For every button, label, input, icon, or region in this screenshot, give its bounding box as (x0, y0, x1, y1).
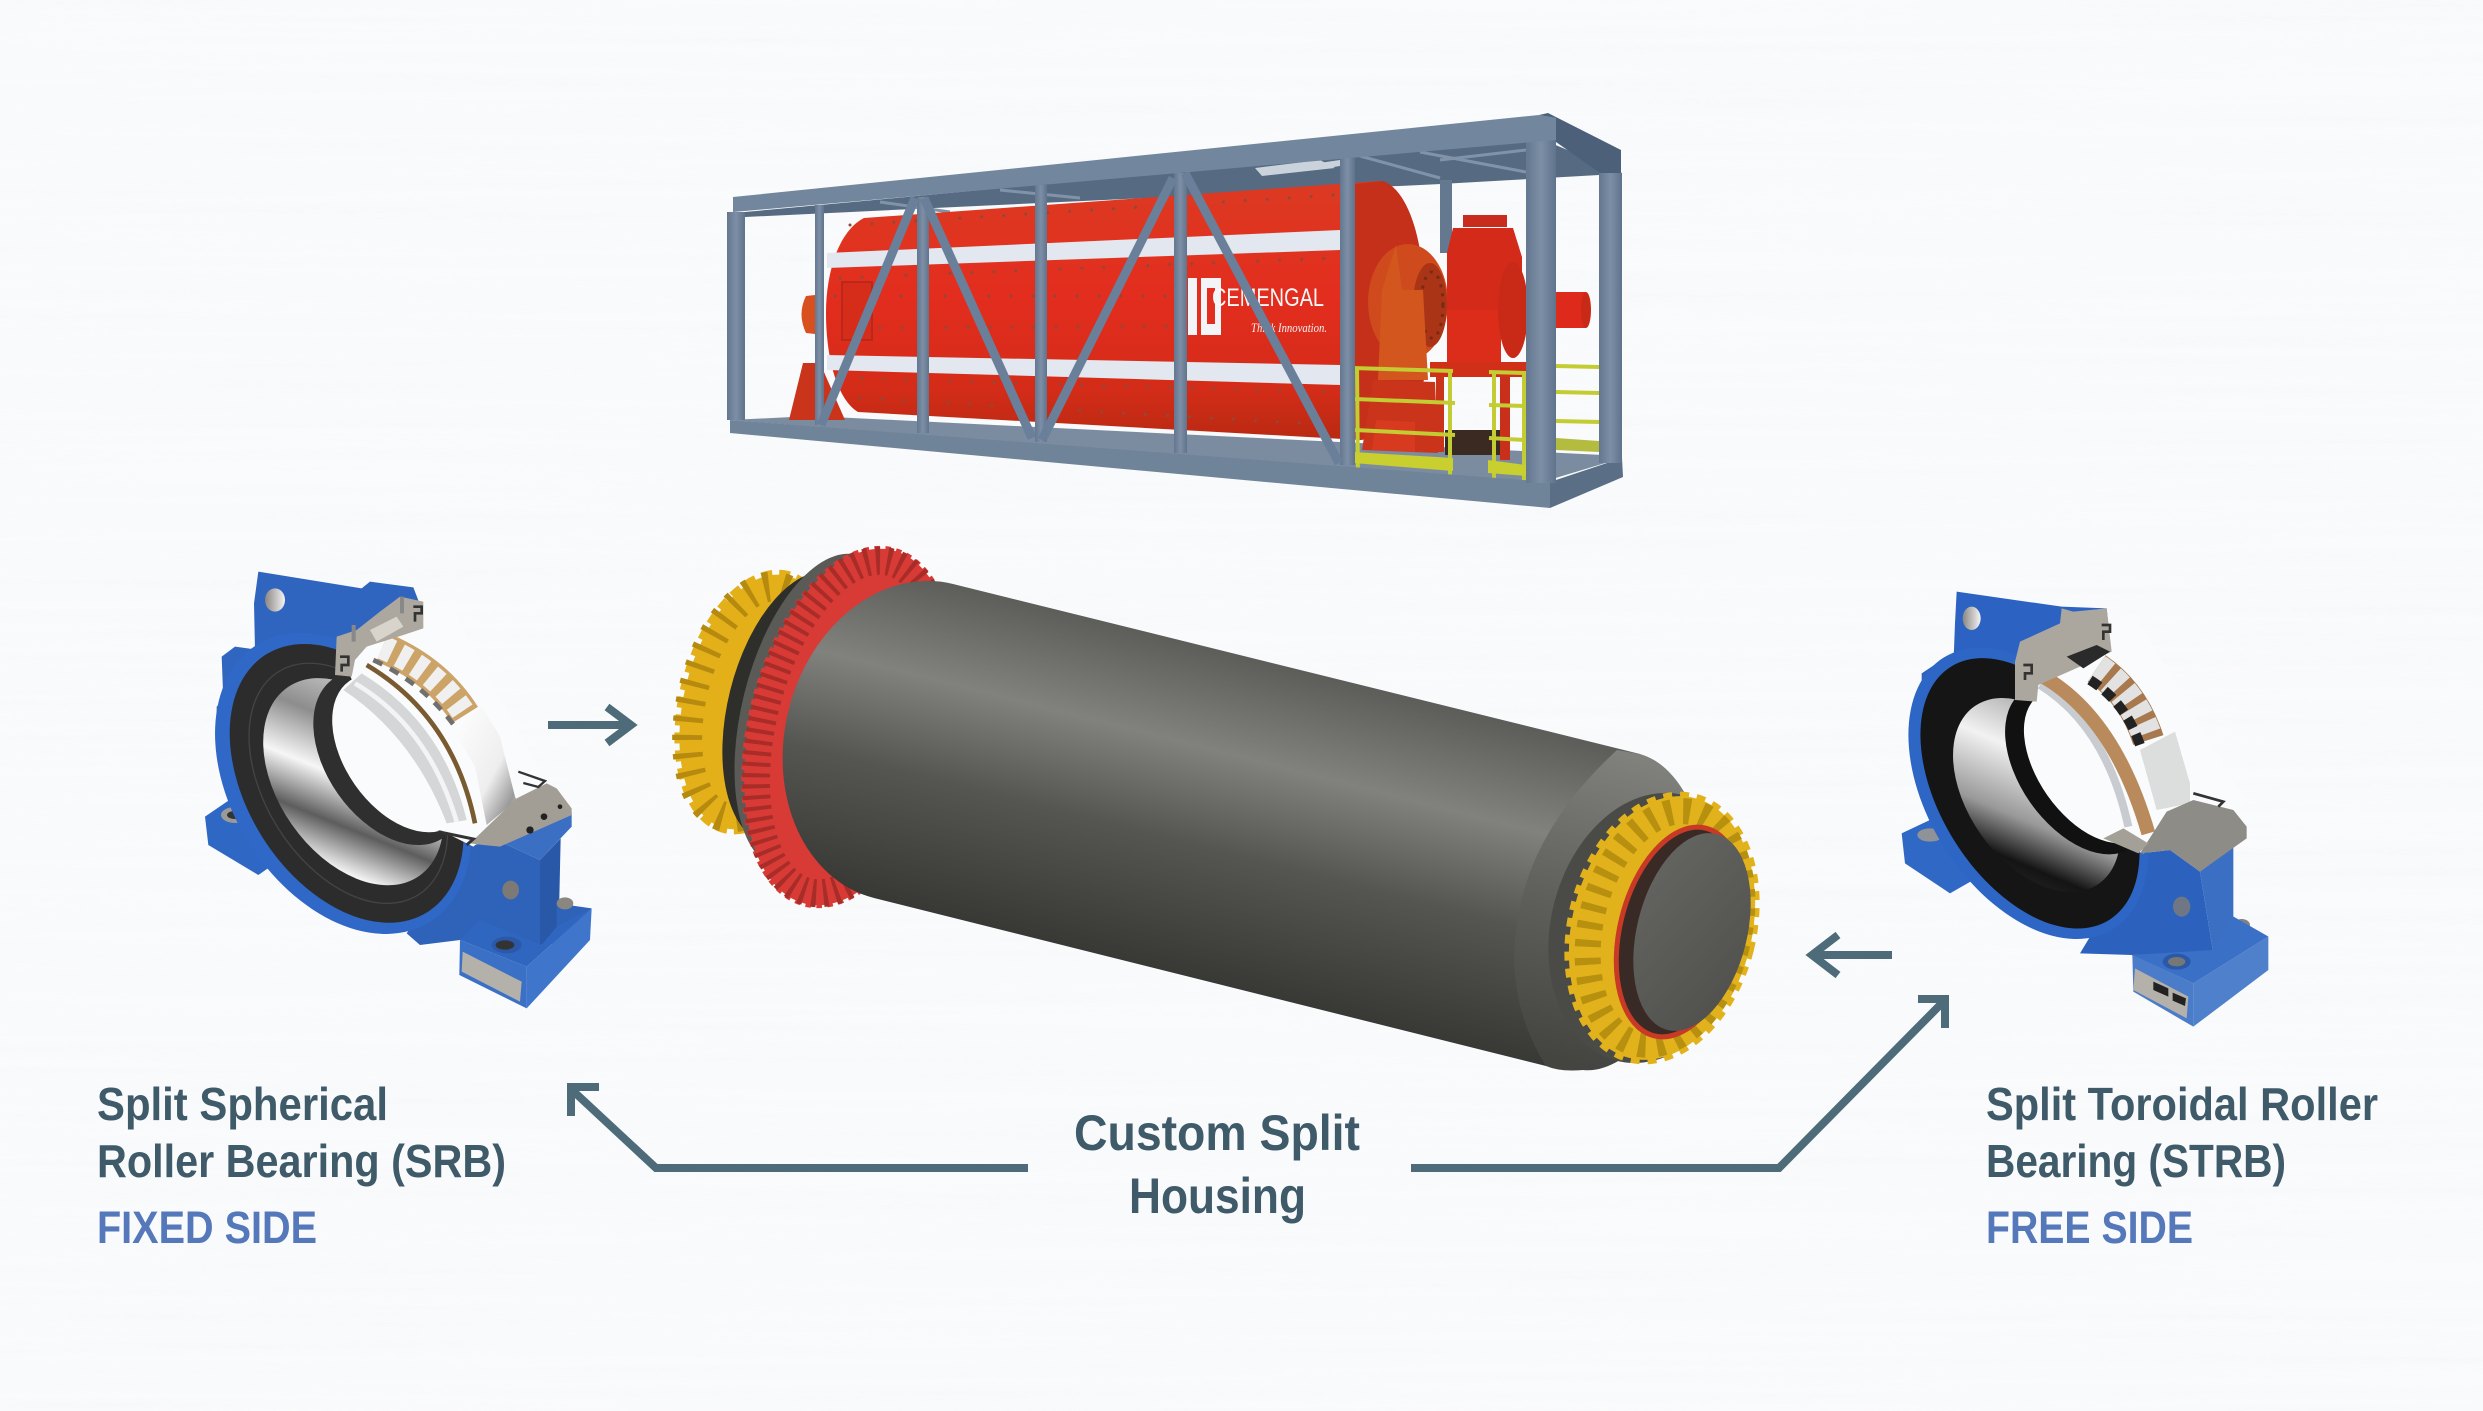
frame diagonal braces (821, 173, 1339, 463)
see-through opening (1998, 667, 2179, 866)
lower plate (438, 772, 572, 847)
label: left bearing: Roller Bearing (SRB) (97, 1135, 506, 1187)
label: right bearing: FREE SIDE (1986, 1202, 2193, 1253)
top seal section (2015, 608, 2112, 702)
Cemengal logo: Think Innovation. (1251, 320, 1327, 335)
housing lugs (1915, 663, 1953, 757)
yellow gear near end (1540, 774, 1784, 1082)
nameplate (2133, 968, 2188, 1018)
yellow railings (1353, 366, 1599, 490)
see-through opening (304, 649, 496, 857)
roof underside of frame (745, 138, 1622, 217)
white bands (827, 230, 1340, 268)
roller shaft assembly (652, 525, 1784, 1085)
mill left trunnion (802, 295, 815, 334)
label: custom split housing: Housing (1129, 1168, 1306, 1224)
label: right bearing: Bearing (STRB) (1986, 1135, 2286, 1187)
mill shell (826, 181, 1422, 440)
label: left bearing: Split Spherical (97, 1078, 388, 1130)
frame top beam (733, 115, 1556, 212)
cutaway gap (337, 600, 547, 847)
end cap (1614, 821, 1770, 1043)
back of ring (1976, 660, 2178, 880)
pedestal foot (2132, 917, 2268, 1027)
black ring face (1875, 619, 2185, 967)
label: custom split housing: Custom Split (1074, 1105, 1360, 1161)
left bearing: split spherical roller bearing (162, 572, 592, 1008)
arrow: housing label to right bearing (1411, 999, 1945, 1168)
top seal section (335, 597, 423, 677)
bore surface (226, 644, 481, 919)
label: left bearing: FIXED SIDE (97, 1202, 317, 1253)
rollers (2090, 668, 2148, 745)
Cemengal logo: CEMENGAL (1212, 284, 1324, 312)
label: right bearing (1986, 1078, 2378, 1253)
red gear (709, 525, 989, 929)
left foot (1902, 818, 1973, 893)
cutaway gap (2017, 613, 2247, 853)
arrow: left bearing to roller (548, 707, 631, 743)
left foot (205, 795, 280, 875)
back post (1440, 180, 1452, 253)
output shaft (1550, 292, 1591, 328)
label: custom split housing (1074, 1105, 1360, 1224)
lower plate (2103, 793, 2247, 872)
arrow: right bearing to roller (1812, 935, 1892, 975)
roller body (783, 581, 1690, 1066)
neck (1521, 771, 1779, 1085)
nameplate (462, 952, 522, 1002)
hub between gears (696, 536, 931, 888)
pedestal foot (459, 897, 592, 1008)
mill end disc (1355, 181, 1424, 440)
housing flange (1953, 592, 2110, 670)
floor deck (730, 416, 1622, 483)
drive bearing housing (1362, 244, 1448, 453)
label: left bearing (97, 1078, 506, 1253)
rivet rows (835, 195, 1335, 425)
outer race section (2140, 732, 2190, 810)
bore surface (1919, 667, 2155, 923)
frame bottom beam (730, 420, 1550, 508)
outer race section (453, 707, 517, 825)
frame posts (727, 140, 1622, 483)
back of ring (282, 644, 494, 873)
housing flange (254, 572, 423, 660)
pedestal column (407, 812, 572, 945)
gearbox (1430, 215, 1528, 460)
bearing inner race (343, 673, 467, 823)
bronze cage ring (2043, 677, 2148, 833)
yellow gear far end (652, 556, 860, 848)
arrow: housing label to left bearing (571, 1087, 1028, 1168)
black ring face (181, 601, 512, 965)
pedestal column (2080, 847, 2233, 955)
Cemengal logo (1188, 278, 1327, 335)
hatch panel (842, 282, 872, 340)
mill left support (789, 363, 845, 420)
label: right bearing: Split Toroidal Roller (1986, 1078, 2378, 1130)
housing lugs (217, 647, 260, 737)
red inner gear and recess (1596, 814, 1764, 1050)
blue ring rim (1859, 605, 2198, 982)
bearing inner race (2040, 685, 2128, 827)
ball mill in steel container frame (727, 113, 1623, 508)
roller shoulder (1514, 750, 1705, 1070)
cage and rollers (373, 647, 465, 727)
bronze race line (367, 665, 475, 823)
right bearing: split toroidal roller bearing (1859, 592, 2268, 1027)
blue ring rim (162, 586, 525, 981)
